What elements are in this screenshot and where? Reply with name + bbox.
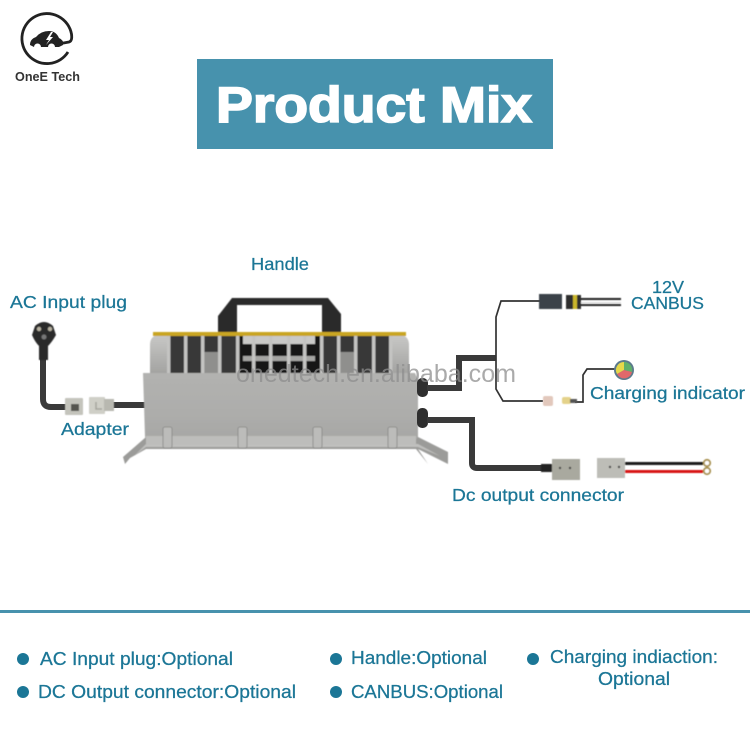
option: DC Output connector: DC Output connector:Optional (38, 682, 296, 702)
watermark: onedtech.en.alibaba.com (236, 360, 516, 388)
icon: DC connector terminal side (597, 458, 710, 478)
icon: electric car (30, 31, 63, 47)
title text: Product Mix (216, 77, 532, 133)
label: Handle: Handle (251, 254, 309, 274)
base flange (123, 437, 448, 464)
charger unit (123, 298, 448, 464)
AC input cable (43, 345, 66, 407)
heatsink block (150, 335, 409, 374)
label: Adapter: Adapter (61, 419, 129, 439)
option: Charging indication: Charging indiaction: (550, 647, 718, 667)
option: Charging indication: Optional (598, 669, 670, 689)
label: 12V: 12V (652, 277, 684, 297)
icon: adapter connector right (89, 397, 114, 414)
thin split cables (496, 301, 616, 402)
DC and signal thick cables (427, 358, 542, 468)
logo: OneE Tech (15, 14, 80, 84)
icon: charging indicator gauge (614, 360, 634, 380)
AC output cable to charger (113, 402, 145, 408)
icon: DC connector plug side (541, 459, 580, 480)
handle (218, 298, 341, 334)
cable glands (417, 378, 428, 428)
diagram: charger with accessories (32, 294, 710, 480)
icon: CANBUS connector (539, 294, 621, 309)
option: AC Input plug: AC Input plug:Optional (40, 649, 233, 669)
icon: small indicator connector (543, 396, 577, 406)
option: Handle: Handle:Optional (351, 648, 487, 668)
icon: adapter connector left (65, 398, 83, 415)
options list (17, 647, 718, 702)
divider line (0, 610, 750, 613)
logo wordmark: OneE Tech (15, 70, 80, 84)
label: CANBUS: CANBUS (631, 293, 704, 313)
option: CANBUS: CANBUS:Optional (351, 682, 503, 702)
label: AC Input plug: AC Input plug (10, 292, 127, 312)
label: Dc output connector: Dc output connector (452, 485, 624, 505)
yellow top plate (153, 332, 406, 336)
option: Charging indication (527, 647, 718, 689)
title banner (197, 59, 553, 149)
main housing (143, 373, 418, 442)
icon: AC plug (32, 322, 56, 360)
mounting studs (163, 427, 397, 448)
label: Charging indicator: Charging indicator (590, 383, 745, 403)
